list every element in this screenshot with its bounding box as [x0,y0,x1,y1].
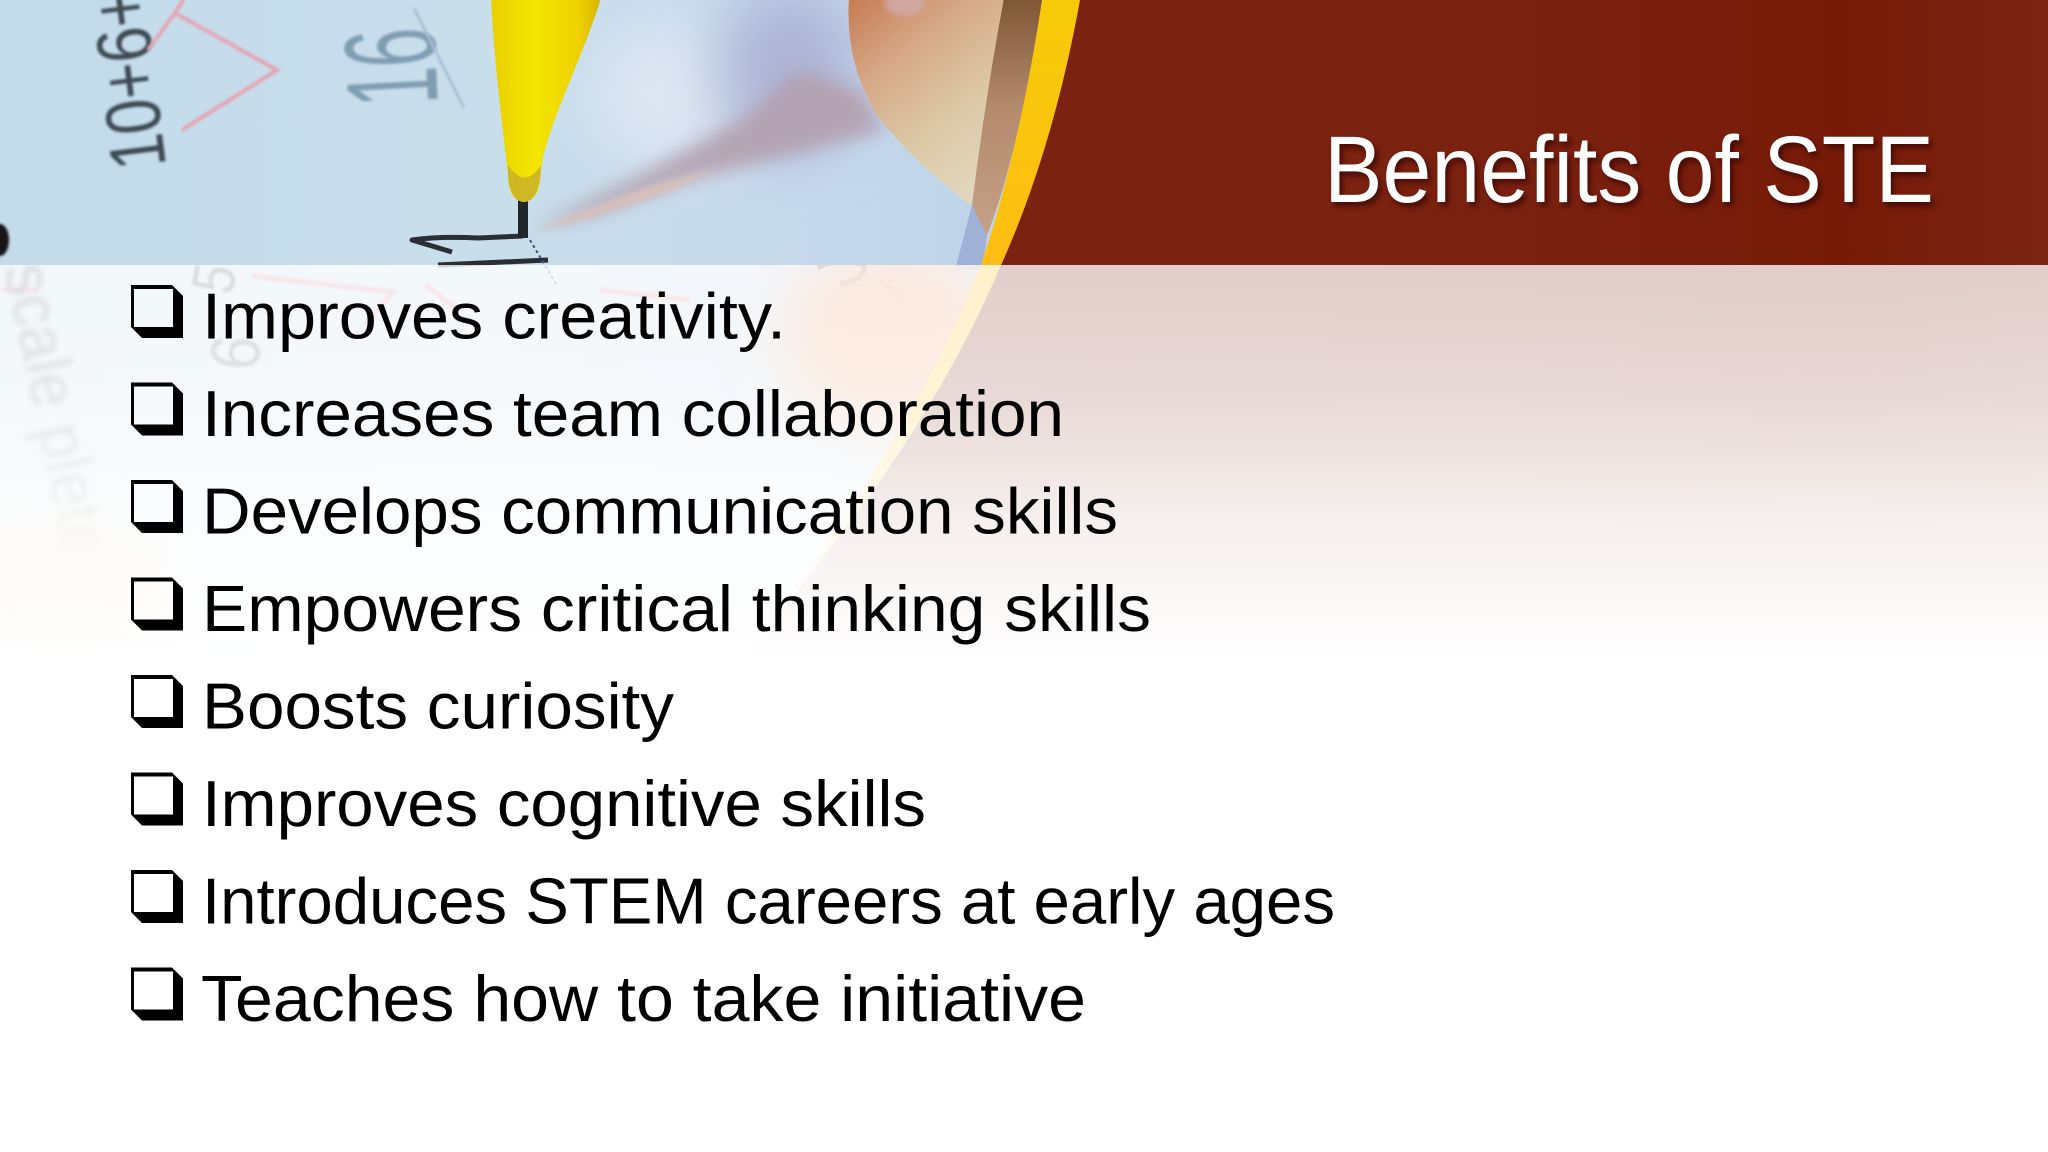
ink blot at left edge [0,224,9,256]
bullet: boosts curiosity: Boosts curiosity [202,670,675,742]
pale marks under the band: 5 [179,259,250,298]
photo background: pen writing math on paper [0,0,1042,554]
yellow pen [491,0,601,202]
handwritten 1 under pen [412,236,548,265]
pale marks under the band [1,265,978,532]
pale marks under the band: 6 [195,333,276,373]
lavender haze around hand shadow [595,0,860,165]
title: Benefits of STE [1324,117,1934,223]
hand [849,0,1007,206]
bullet: team collaboration: Increases team collaboration [202,377,1064,450]
hand shadow on paper [530,70,885,230]
bullet: critical thinking: Empowers critical thinking skills [202,572,1151,645]
red title panel with curved edge [700,0,2048,720]
red tick mark [148,0,277,130]
gold curved stripe [790,0,1080,595]
bullet: cognitive skills: Improves cognitive skills [202,767,926,840]
bullet: take initiative: Teaches how to take initiative [201,962,1086,1035]
translucent white content band [0,265,2048,1152]
bullet: communication skills: Develops communication skills [202,474,1118,548]
bullet list [131,280,1335,1035]
bullet: STEM careers: Introduces STEM careers at early ages [202,864,1335,938]
bullet: improves creativity: Improves creativity. [202,280,786,352]
pen lead [518,196,528,238]
